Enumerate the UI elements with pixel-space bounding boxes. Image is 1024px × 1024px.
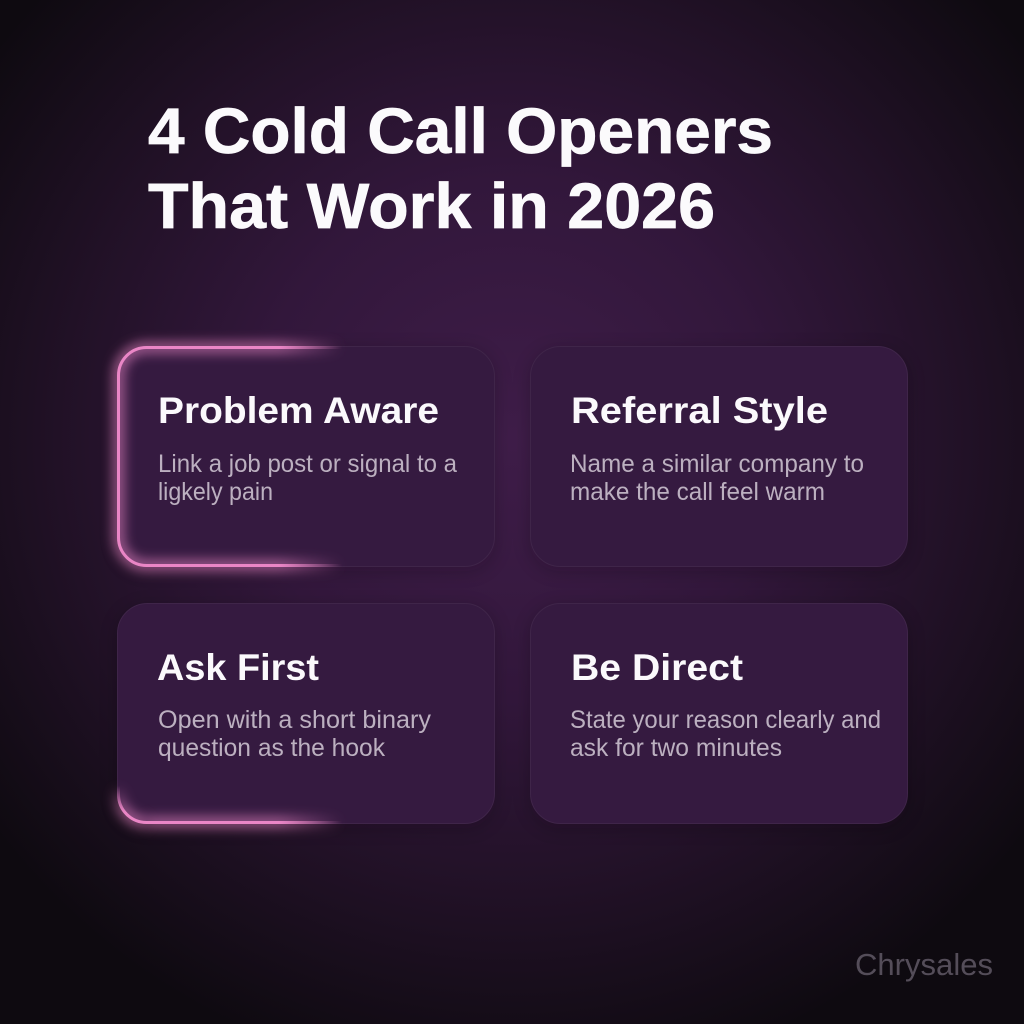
description: ligkely pain: [158, 478, 273, 506]
description: State your reason clearly and: [570, 706, 881, 734]
heading: Referral Style: [571, 390, 828, 431]
panel: Problem Aware: [117, 346, 495, 571]
panel: Referral Style: [530, 346, 908, 571]
description: make the call feel warm: [570, 478, 825, 506]
description: question as the hook: [158, 734, 385, 762]
heading: Ask First: [157, 647, 319, 688]
glowing edge highlight: [118, 786, 342, 822]
description: [570, 450, 864, 506]
title: [148, 95, 773, 242]
description: [158, 450, 457, 506]
title: 4 Cold Call Openers: [148, 95, 773, 167]
description: [570, 706, 881, 762]
heading: Be Direct: [571, 647, 743, 688]
description: [158, 706, 431, 762]
description: Name a similar company to: [570, 450, 864, 478]
description: ask for two minutes: [570, 734, 782, 762]
description: Link a job post or signal to a: [158, 450, 457, 478]
panel: Be Direct: [530, 604, 908, 828]
panel: Ask First: [117, 604, 495, 828]
heading: Problem Aware: [158, 390, 439, 431]
title: That Work in 2026: [148, 170, 715, 242]
glowing edge highlight: [118, 348, 342, 566]
brand wordmark: Chrysales: [855, 947, 993, 982]
description: Open with a short binary: [158, 706, 431, 734]
